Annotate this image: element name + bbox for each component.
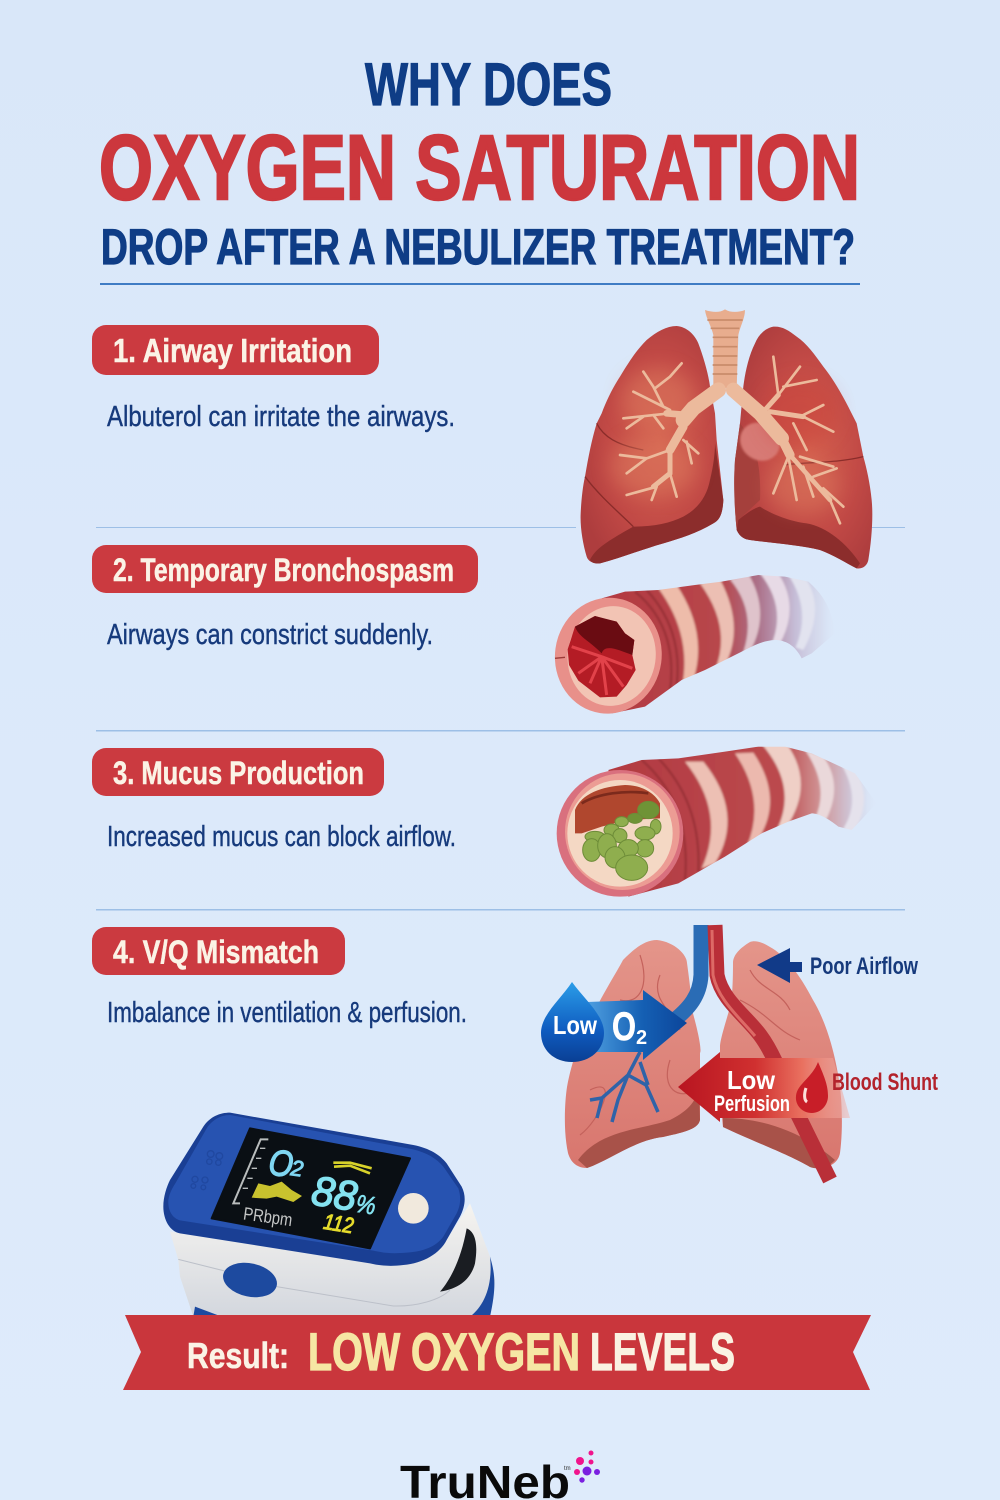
screen: [212, 1128, 410, 1248]
icon: lungs: [581, 309, 872, 568]
arrow: poor airflow: Poor Airflow: [810, 953, 918, 980]
heading pill 2: 2. Temporary Bronchospasm: [113, 552, 454, 588]
arrow: poor airflow: [757, 948, 918, 983]
description 2: Airways can constrict suddenly.: [107, 619, 433, 651]
screen readouts: O: [266, 1141, 296, 1185]
left lung: [565, 940, 701, 1168]
panel: bronchospasm: [92, 545, 478, 651]
heading pill 1: 1. Airway Irritation: [113, 332, 352, 369]
blue shell: [163, 1113, 465, 1266]
icon: mucus-blocked airway: [556, 746, 866, 897]
screen readouts: 112: [322, 1209, 355, 1238]
white body: [170, 1203, 495, 1317]
right lung: [720, 941, 842, 1168]
lung bases: [590, 443, 723, 564]
embossed dots: [191, 1151, 223, 1190]
fissures: [585, 423, 863, 527]
screen readouts: 88: [309, 1166, 360, 1220]
icon: constricted airway: [554, 575, 824, 714]
title: [99, 51, 860, 275]
screen readouts: %: [354, 1190, 378, 1221]
panel: airway irritation: [92, 325, 455, 433]
arrow: low O2: Low: [553, 1010, 598, 1040]
orange haze: [622, 368, 695, 432]
heading pill 2: [92, 545, 478, 593]
bronchial tree right: [733, 357, 843, 523]
heading pill 4: 4. V/Q Mismatch: [113, 934, 319, 970]
heading pill 4: [92, 927, 345, 975]
red vessel: [715, 925, 830, 1180]
result banner: LOW OXYGEN: [308, 1323, 580, 1382]
heading pill 1: [92, 325, 379, 375]
diagram: V/Q mismatch lungs: [541, 925, 938, 1180]
arrow: low O2: O: [612, 1005, 636, 1049]
arrow: low perfusion: Blood Shunt: [832, 1069, 938, 1096]
arrow: low perfusion: Perfusion: [714, 1091, 790, 1116]
bronchial tree left: [620, 363, 718, 500]
title: WHY DOES: [365, 51, 612, 118]
blue vessel: [672, 925, 701, 1022]
arrow: low O2: [541, 982, 687, 1062]
arrow: low perfusion: [678, 1052, 938, 1122]
heading pill 3: 3. Mucus Production: [113, 755, 364, 791]
panel: V/Q mismatch: [92, 927, 467, 1029]
arrow: low perfusion: Low: [727, 1065, 776, 1095]
screen readouts: 2: [288, 1155, 305, 1182]
panel: mucus production: [92, 748, 456, 853]
arrow: low O2: 2: [636, 1027, 647, 1049]
logo: TruNeb: tm: [564, 1466, 571, 1472]
trachea: [705, 309, 745, 388]
result banner: [123, 1315, 871, 1390]
heading pill 3: [92, 748, 384, 796]
screen readouts: [233, 1139, 378, 1238]
left lung: [581, 326, 723, 563]
right lung: [734, 327, 872, 568]
icon: pulse oximeter: [163, 1113, 495, 1317]
button: [398, 1193, 429, 1224]
result banner: Result:: [187, 1335, 289, 1376]
screen readouts: PRbpm: [242, 1203, 294, 1230]
description 4: Imbalance in ventilation & perfusion.: [107, 997, 467, 1029]
result banner: LEVELS: [590, 1323, 735, 1382]
description 1: Albuterol can irritate the airways.: [107, 401, 455, 433]
description 3: Increased mucus can block airflow.: [107, 821, 456, 853]
